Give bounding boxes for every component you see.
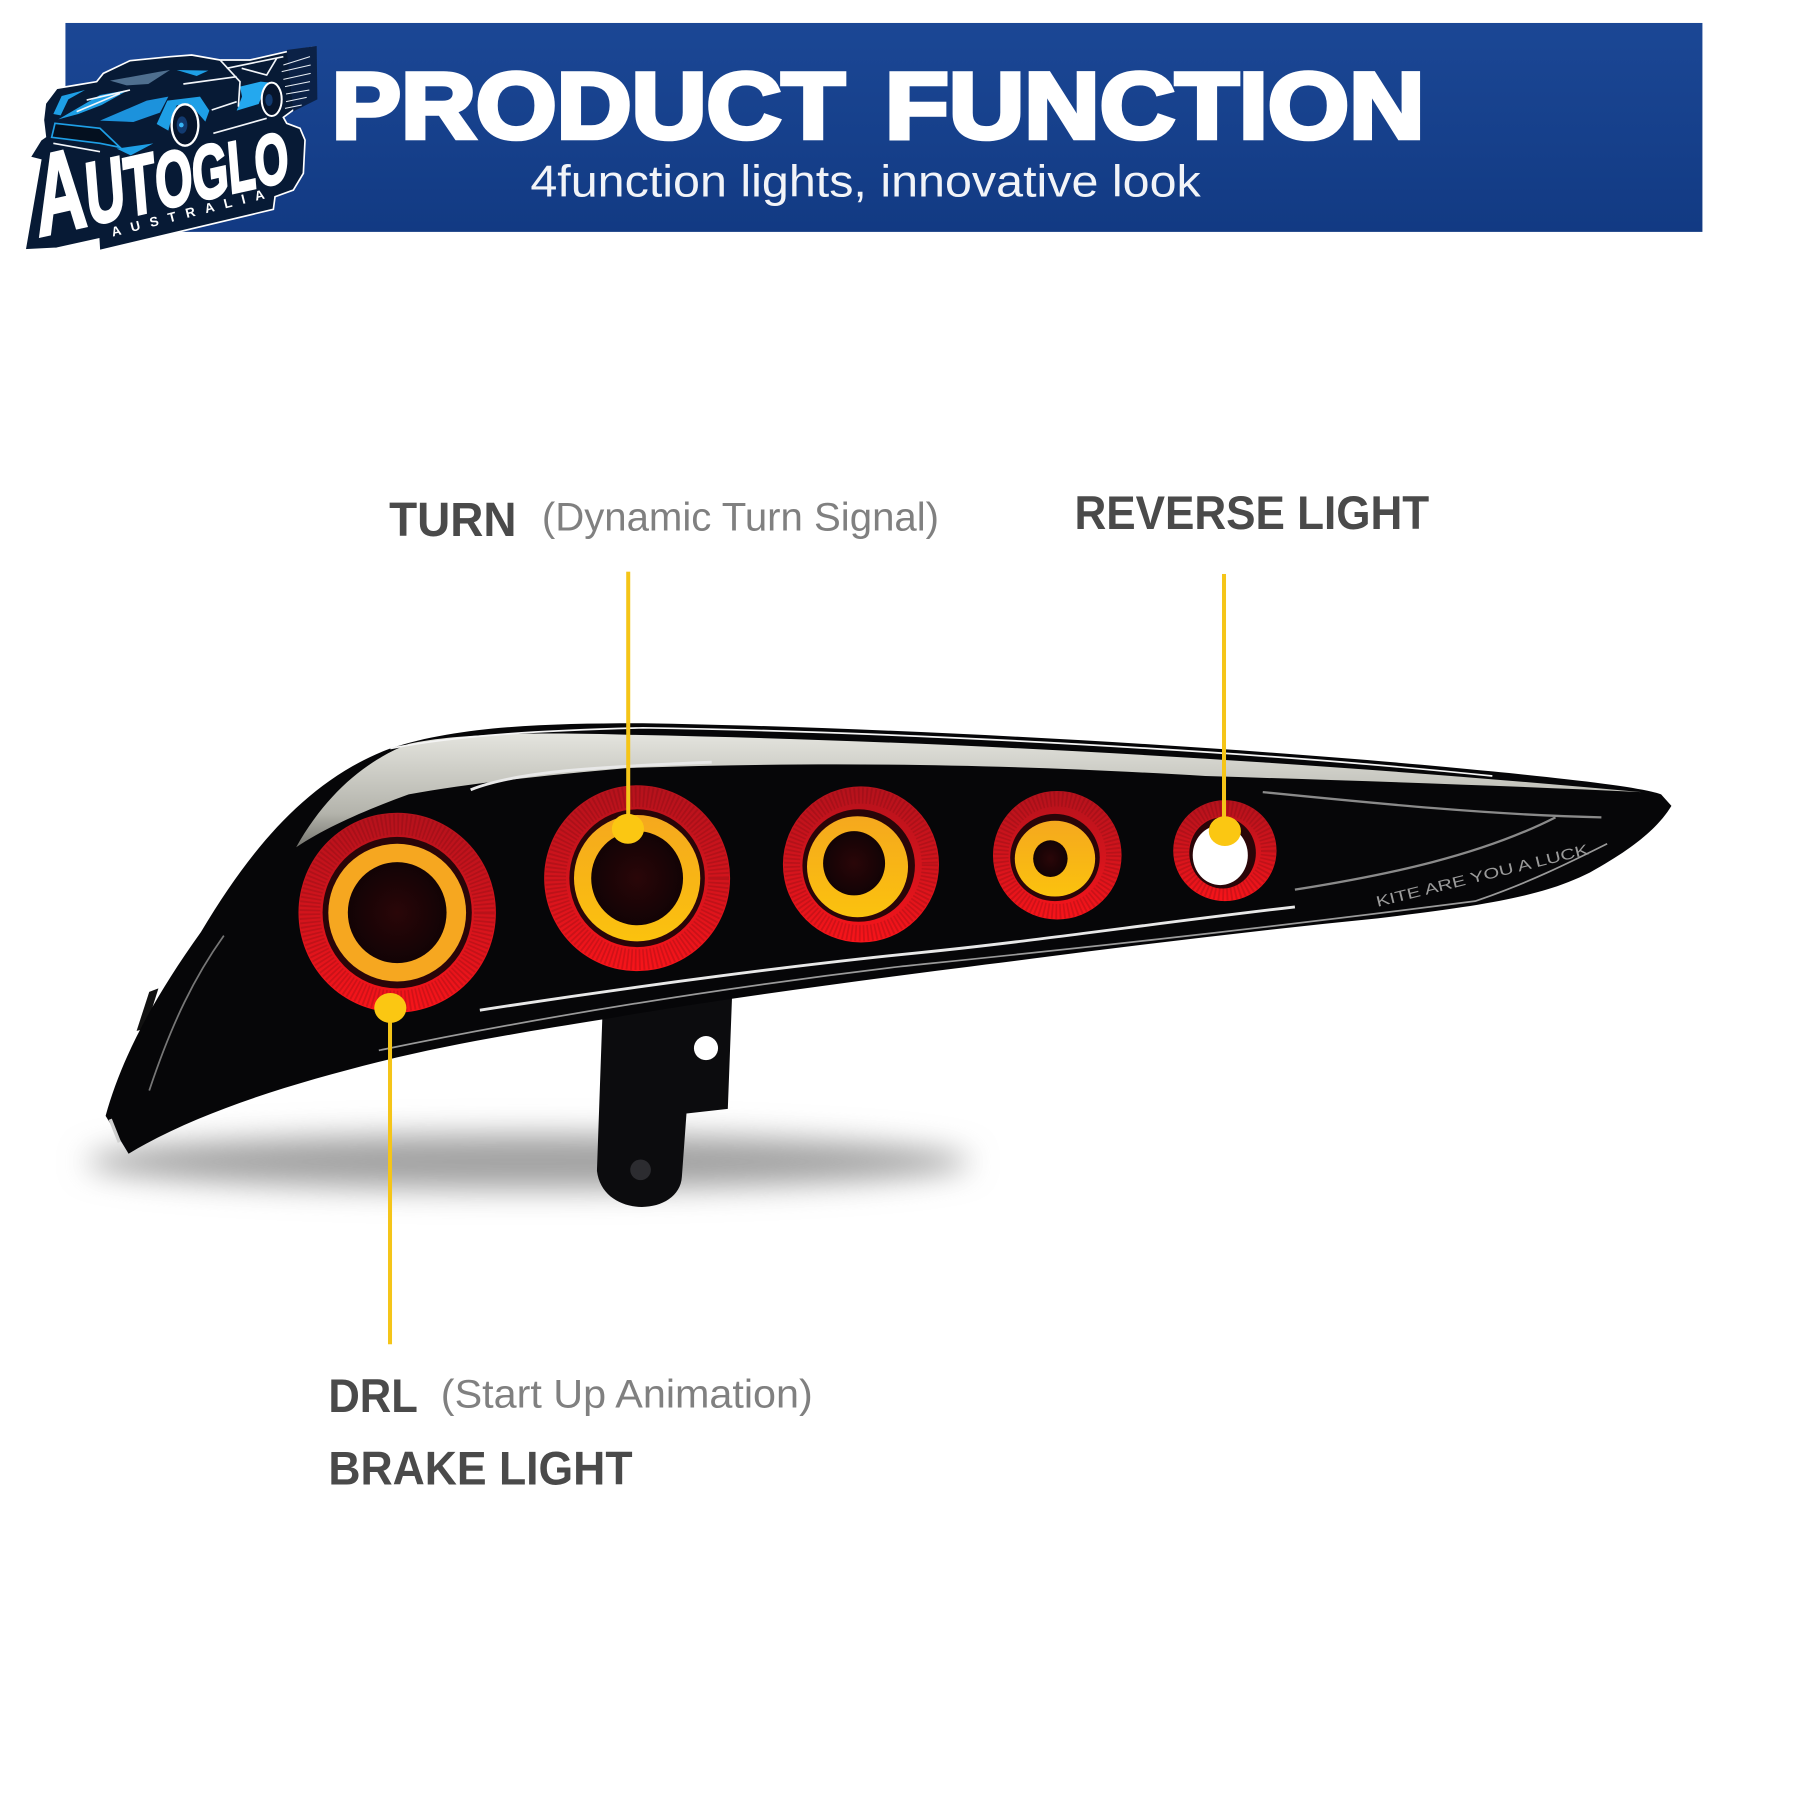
side clip [137,988,158,1031]
logo: Autoglo Australia [25,46,317,262]
subtitle: 4function lights, innovative look [530,156,1201,206]
light 4 [993,791,1122,920]
product: tail light [86,723,1671,1207]
label dynamic turn signal: (Dynamic Turn Signal) [542,494,939,539]
logo tagline AUSTRALIA: AUSTRALIA [110,187,266,240]
title: PRODUCT [332,53,845,158]
label brake light: BRAKE LIGHT [328,1441,633,1494]
light 5 reverse [1173,800,1277,901]
callout: turn [389,493,939,844]
embossed text on lens: KITE ARE YOU A LUCK [1374,841,1590,911]
ground shadow [86,1134,970,1189]
logo car body [52,57,283,155]
header banner [65,23,1702,232]
lamp housing [106,723,1671,1154]
logo badge silhouette [25,47,315,251]
label reverse light: REVERSE LIGHT [1074,486,1429,539]
label start up animation: (Start Up Animation) [441,1371,813,1416]
light 1 [298,813,496,1012]
label DRL: DRL [328,1369,418,1422]
callout: reverse light [1074,486,1429,846]
mounting bracket [597,987,732,1207]
logo wing stripes [282,46,317,111]
light 2 [544,785,730,971]
logo wordmark AUTOGLO: AUTOGLO [30,78,292,262]
title: FUNCTION [885,53,1425,158]
label turn: TURN [389,493,517,547]
clear upper band [296,733,1642,847]
callout: DRL and brake [328,993,813,1494]
title [332,53,1425,158]
highlight streaks [110,728,1607,1142]
light 3 [783,786,939,942]
